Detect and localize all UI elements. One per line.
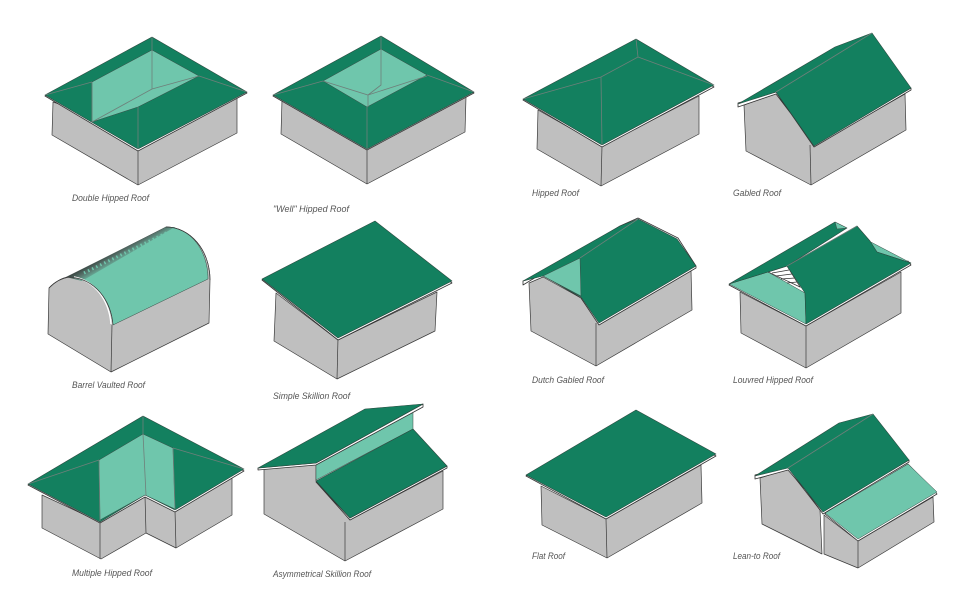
wall corner (111, 325, 112, 372)
panel: well hipped roof (273, 36, 474, 214)
wall corner (805, 325, 807, 368)
walls (264, 463, 443, 561)
roof lines (28, 416, 244, 521)
wall corner (810, 145, 811, 185)
wall corner (337, 338, 338, 379)
roof (523, 219, 696, 323)
roof eave (262, 222, 452, 340)
caption: Gabled Roof (733, 188, 782, 198)
front arch trim (74, 277, 111, 324)
caption: Dutch Gabled Roof (532, 375, 605, 385)
caption: Louvred Hipped Roof (733, 375, 814, 385)
roof (45, 37, 247, 149)
roof eave (526, 411, 716, 519)
small rear light face (835, 222, 847, 229)
panel: dutch gabled roof (523, 218, 696, 385)
wall corner (137, 149, 139, 185)
roof eave (28, 417, 244, 523)
wall corners (100, 496, 176, 559)
roof eave (729, 261, 911, 326)
roof lines (273, 36, 474, 149)
roof (28, 416, 244, 522)
walls (52, 98, 237, 185)
ridge speckle (84, 232, 168, 273)
roof eave (523, 40, 714, 147)
wall corner (601, 146, 602, 186)
panel: louvred hipped roof (729, 222, 911, 385)
light faces (99, 434, 175, 520)
walls (740, 272, 901, 368)
roof lines (523, 39, 714, 145)
panel: barrel vaulted roof (48, 227, 210, 390)
wall corner (857, 540, 859, 568)
walls (42, 478, 232, 559)
caption: Flat Roof (532, 551, 566, 561)
panel: asymmetrical skillion roof (258, 404, 447, 579)
roof (273, 36, 474, 149)
well light faces (92, 50, 199, 122)
walls (537, 96, 699, 186)
caption: Barrel Vaulted Roof (72, 380, 146, 390)
louvre vent (768, 266, 800, 287)
main roof eaves (755, 460, 909, 514)
lean-to roof eave (825, 464, 937, 541)
caption: Multiple Hipped Roof (72, 568, 153, 578)
wall corner (606, 519, 607, 558)
walls (274, 292, 437, 379)
light right face (867, 240, 911, 263)
ridge line (776, 33, 872, 92)
walls (281, 97, 466, 184)
well light faces (323, 49, 427, 107)
roof eaves (523, 218, 696, 325)
walls (48, 227, 210, 372)
panel: lean-to roof (733, 414, 937, 568)
shaded ridge (66, 227, 175, 281)
caption: Simple Skillion Roof (273, 391, 351, 401)
roof (738, 33, 911, 146)
roof (523, 39, 714, 145)
roof eave (45, 38, 247, 151)
walls (529, 270, 692, 366)
panel: multiple hipped roof (28, 416, 244, 578)
walls (541, 465, 702, 558)
ridge line (788, 414, 873, 468)
lean-to walls (824, 497, 934, 568)
ridge line (580, 219, 638, 258)
roof eaves (738, 88, 911, 147)
main house walls (760, 469, 822, 554)
main roof (755, 414, 909, 512)
caption: Hipped Roof (532, 188, 580, 198)
panel: double hipped roof (45, 37, 247, 203)
panel: simple skillion roof (262, 221, 452, 401)
curved vault (78, 227, 208, 325)
upper left roof (729, 222, 847, 284)
walls (744, 92, 906, 185)
panel: gabled roof (733, 33, 911, 198)
upper roof (258, 404, 423, 468)
roof lines (45, 37, 247, 149)
lower roof eave (316, 466, 447, 520)
panel: flat roof (526, 410, 716, 561)
caption: Lean-to Roof (733, 551, 781, 561)
upper wall light (316, 412, 413, 480)
panel: hipped roof (523, 39, 714, 198)
caption: Asymmetrical Skillion Roof (272, 569, 372, 579)
wall corner (366, 149, 368, 184)
roof (526, 410, 716, 517)
wall corner (595, 323, 597, 366)
roof (262, 221, 452, 338)
roof eave (273, 37, 474, 150)
caption: Double Hipped Roof (72, 193, 150, 203)
gable light face (543, 258, 581, 296)
arch outline (49, 227, 210, 325)
lean-to light roof (825, 464, 937, 539)
wall corner (344, 522, 346, 561)
light lower faces (729, 272, 806, 324)
ridge line (787, 226, 857, 266)
lower roof (316, 429, 447, 518)
main roof (787, 226, 911, 324)
upper roof eave (258, 404, 423, 470)
caption: "Well" Hipped Roof (273, 204, 350, 214)
